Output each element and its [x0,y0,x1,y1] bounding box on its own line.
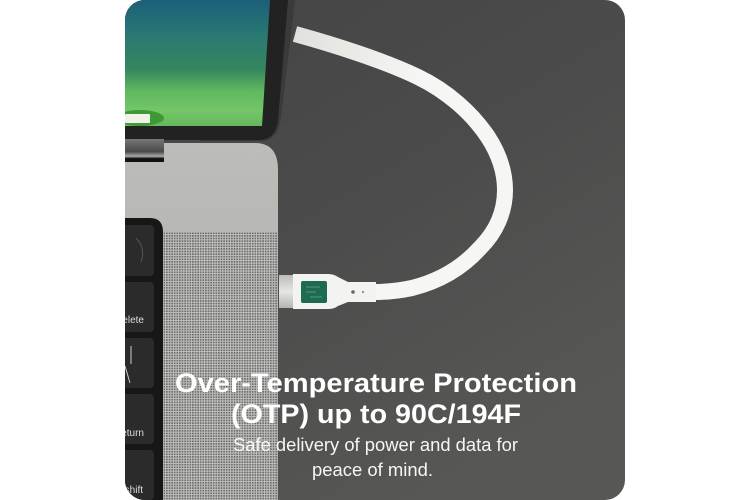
tablet outer edge [200,0,295,141]
key: shift [125,450,154,500]
metal plug [279,275,293,308]
title [175,368,577,429]
key: delete [125,282,154,332]
subtitle: peace of mind. [312,460,433,480]
subtitle [233,435,518,480]
panel: product photo [116,0,625,500]
key: backslash [125,338,154,388]
white cable [295,34,505,292]
title: (OTP) up to 90C/194F [231,399,521,429]
dark background [125,0,625,500]
green temperature display [301,281,327,303]
cable connector [279,274,376,309]
tablet home indicator [125,110,164,126]
key: return [125,394,154,444]
speaker grille [163,232,277,500]
key: return: return [118,428,144,439]
keyboard [125,218,163,500]
indicator dots [351,290,364,294]
subtitle: Safe delivery of power and data for [233,435,518,455]
key: power [125,225,154,276]
laptop body [125,143,278,500]
tablet bezel [125,0,288,140]
title: Over-Temperature Protection [175,368,577,398]
tablet screen [125,0,270,126]
laptop hinge [125,139,164,162]
key: delete: delete [117,315,144,326]
key: shift: shift [125,485,143,496]
connector body [293,274,376,309]
